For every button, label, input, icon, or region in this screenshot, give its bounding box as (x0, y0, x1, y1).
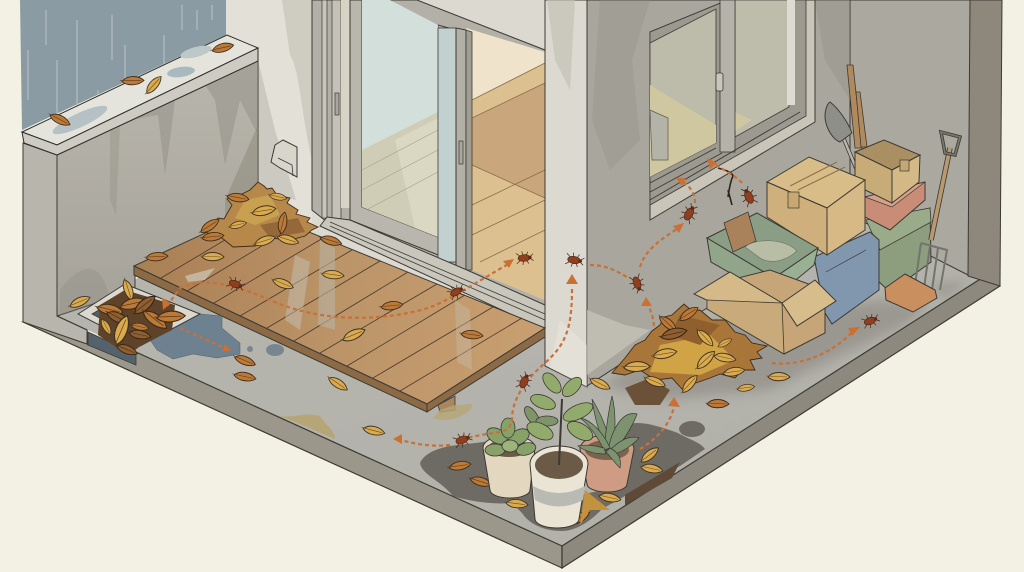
sliding glass door (312, 0, 545, 330)
concrete slab front faces (23, 276, 1000, 568)
back wall (226, 0, 316, 225)
potted plants (483, 370, 639, 528)
interior room (466, 28, 545, 300)
sack (885, 274, 937, 312)
door glass panes (320, 0, 545, 330)
pot band (533, 486, 585, 506)
puddle (150, 314, 240, 359)
large leaf pile (612, 304, 767, 405)
wall vent outlet (271, 140, 297, 177)
soil (488, 439, 530, 457)
floor surface (57, 215, 985, 546)
leaf pile by wall (197, 182, 318, 249)
floor leaves (232, 352, 790, 437)
open cardboard box (694, 270, 836, 354)
pot soil (535, 451, 583, 479)
dotted orange pest paths (167, 162, 855, 449)
dark wet patches around plants (420, 421, 705, 531)
right walls (587, 0, 1002, 386)
spiky plant (578, 396, 639, 468)
tall tools against wall (825, 65, 867, 168)
floor shading near boxes and pillar (600, 280, 970, 400)
floor stains (247, 344, 473, 439)
small cardboard box (855, 140, 920, 203)
pink pot soil (585, 440, 629, 460)
cream pot (483, 435, 535, 498)
storage bins (814, 182, 931, 324)
arrowheads (162, 158, 860, 444)
garden fork (915, 132, 960, 290)
leaves on deck (144, 233, 483, 345)
rainy sky panel (20, 0, 226, 130)
cockroaches (225, 184, 881, 450)
interior wood floor (472, 63, 545, 300)
large cardboard box (767, 157, 865, 255)
right wall window (650, 0, 815, 220)
leaves on parapet (47, 41, 235, 128)
concrete pillar (545, 0, 650, 387)
wooden deck (134, 210, 545, 412)
leaves beneath plants (446, 444, 664, 528)
foliage of left plant (484, 418, 537, 457)
green bin with contents (707, 212, 818, 298)
tall plant (522, 370, 596, 465)
floor drain with leaves (66, 276, 200, 365)
left parapet wall (22, 35, 258, 344)
white pot (530, 446, 588, 528)
pink pot (580, 435, 634, 492)
